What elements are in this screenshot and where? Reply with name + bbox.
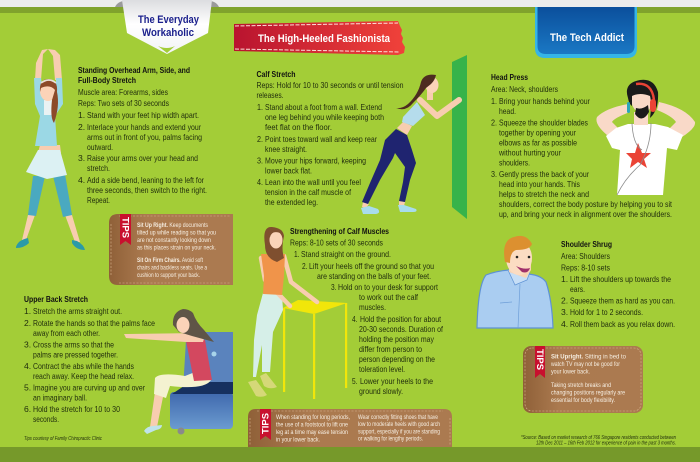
text: upper back stretch: Upper Back Stretch — [24, 294, 88, 304]
text: shoulder shrug: ears. — [570, 284, 585, 294]
text: head press: Area: Neck, shoulders — [491, 84, 558, 94]
text: standing overhead stretch: stretch. — [87, 163, 110, 173]
text: upper back stretch: seconds. — [33, 414, 59, 424]
text: shoulder shrug: Roll them back as you relax down. — [570, 319, 675, 329]
text: standing overhead stretch: Repeat. — [87, 195, 110, 205]
text: upper back stretch: palms are pressed together. — [33, 350, 118, 360]
tips box 3: Sit Upright. Sitting in bed to — [551, 354, 627, 360]
text: strengthening of calf muscles: 1. — [294, 249, 300, 259]
text: shoulder shrug: Area: Shoulders — [561, 251, 610, 261]
tips box 3: Taking stretch breaks and — [551, 382, 611, 389]
text: strengthening of calf muscles: 2. — [302, 261, 308, 271]
text: standing overhead stretch: Full-Body Stretch — [78, 75, 136, 85]
tips box 1: TIPS — [120, 217, 130, 238]
text: head press: head into your hands. This — [499, 179, 580, 189]
text: head press: elbows as far as possible — [499, 138, 577, 148]
footnote: source: 12th Dec 2011 – 16th Feb 2012 for experience of pain in the past 3 months. — [536, 440, 676, 446]
tips box 2: When standing for long periods, — [276, 414, 350, 421]
tips box 2: support, especially if you are standing — [358, 428, 440, 436]
text: calf stretch: tension in the calf muscle of — [265, 187, 351, 197]
text: shoulder shrug: Hold for 1 to 2 seconds. — [570, 307, 643, 317]
heading tab: The Tech Addict — [535, 7, 637, 58]
heading banner: The High-Heeled Fashionista: The High-Heeled Fashionista — [258, 33, 391, 45]
tips box 3: changing positions regularly are — [551, 390, 625, 396]
heading tab: The Tech Addict: The Tech Addict — [550, 32, 624, 44]
text: strengthening of calf muscles: muscles. — [359, 302, 386, 312]
text: head press: Head Press — [491, 72, 528, 82]
panel: the everyday workaholic — [16, 0, 233, 442]
text: strengthening of calf muscles: Hold on to your desk for support — [338, 282, 438, 292]
text: calf stretch: 4. — [257, 177, 263, 187]
text: shoulder shrug: 2. — [561, 296, 568, 306]
text: standing overhead stretch: Reps: Two sets of 30 seconds — [78, 98, 169, 108]
panel: the high-heeled fashionista — [234, 21, 467, 447]
tips box 1: cushion to support your back. — [137, 272, 200, 279]
text: upper back stretch: away from each other. — [33, 328, 100, 338]
text: standing overhead stretch — [78, 65, 207, 205]
text: strengthening of calf muscles: Strengthening of Calf Muscles — [290, 226, 389, 236]
panel: the tech addict — [477, 7, 695, 446]
text: head press: together by opening your — [499, 128, 576, 138]
text: strengthening of calf muscles: 3. — [331, 282, 336, 292]
text: shoulder shrug: Lift the shoulders up towards the — [570, 274, 671, 284]
text: calf stretch — [256, 69, 404, 207]
text: upper back stretch — [24, 294, 155, 424]
text: upper back stretch: Contract the abs while the hands — [33, 361, 134, 371]
text: head press: Squeeze the shoulder blades — [499, 118, 588, 128]
text: strengthening of calf muscles: differ from person to — [359, 344, 422, 354]
text: calf stretch: one leg behind you while keeping both — [265, 112, 384, 122]
tips box 1: as this places strain on your neck. — [137, 244, 216, 252]
text: standing overhead stretch: arms out in front of you, palms facing — [87, 132, 202, 142]
illustration: seated woman on sofa — [124, 309, 233, 434]
text: standing overhead stretch: Raise your arms over your head and — [87, 153, 198, 163]
text: head press: 3. — [491, 169, 497, 179]
text: calf stretch: 1. — [257, 102, 263, 112]
tips box 2: Wear correctly fitting shoes that have — [358, 414, 438, 421]
text: standing overhead stretch: outward. — [87, 142, 113, 152]
text: calf stretch: Point toes toward wall and keep rear — [265, 134, 377, 144]
source note: family chiropractic clinic: Tips courtesy of Family Chiropractic Clinic — [24, 436, 102, 442]
text: calf stretch: releases. — [256, 90, 284, 100]
text: strengthening of calf muscles: ground slowly. — [359, 386, 403, 396]
text: upper back stretch: 5. — [24, 382, 31, 392]
illustration: man in blue shirt shrugging — [477, 236, 553, 328]
text: standing overhead stretch: 2. — [78, 122, 85, 132]
illustration: woman doing calf stretch against wall — [361, 75, 459, 214]
text: strengthening of calf muscles: toleration level. — [359, 364, 405, 374]
tips box 2: the use of a footstool to lift one — [276, 422, 348, 428]
text: strengthening of calf muscles: to work out the calf — [359, 292, 418, 302]
text: shoulder shrug: Reps: 8-10 sets — [561, 262, 610, 272]
text: upper back stretch: reach away. Keep the head relax. — [33, 371, 134, 381]
tips box 2: low to moderate heels with good arch — [358, 421, 440, 428]
illustration: woman doing overhead stretch — [16, 49, 85, 250]
tips box 1: tilted up while reading so that you — [137, 230, 216, 236]
text: standing overhead stretch: Interlace your hands and extend your — [87, 122, 201, 132]
text: upper back stretch: Hold the stretch for 10 to 30 — [33, 404, 120, 414]
text: calf stretch: feet flat on the floor. — [265, 122, 332, 132]
tips box 1: chairs and backless seats. Use a — [137, 264, 207, 272]
text: upper back stretch: 3. — [24, 340, 31, 350]
text: calf stretch: Reps: Hold for 10 to 30 seconds or until tension — [256, 80, 404, 90]
tips box 2: or walking for lengthy periods. — [358, 436, 423, 442]
tips box 1: are not constantly looking down — [137, 237, 211, 244]
text: strengthening of calf muscles: 5. — [352, 376, 358, 386]
text: calf stretch: Stand about a foot from a wall. Extend — [265, 102, 382, 112]
text: upper back stretch: 2. — [24, 318, 31, 328]
text: shoulder shrug: Shoulder Shrug — [561, 239, 612, 249]
text: strengthening of calf muscles: 4. — [352, 314, 358, 324]
tips box 3: TIPS — [535, 349, 545, 370]
tips box 2: TIPS — [260, 413, 270, 434]
text: strengthening of calf muscles — [290, 226, 443, 396]
heading ribbon: The Everyday Workaholic: The Everyday — [138, 14, 200, 26]
tips box 2 — [248, 409, 452, 447]
text: standing overhead stretch: 1. — [78, 110, 85, 120]
text: strengthening of calf muscles: Hold the position for about — [360, 314, 441, 324]
text: strengthening of calf muscles: are standing on the balls of your feet. — [317, 271, 431, 281]
text: shoulder shrug: 1. — [561, 274, 568, 284]
text: strengthening of calf muscles: Lift your heels off the ground so that you — [309, 261, 434, 271]
text: calf stretch: Calf Stretch — [256, 69, 296, 79]
text: head press: shoulders. — [499, 158, 530, 168]
text: upper back stretch: Cross the arms so that the — [33, 340, 114, 350]
text: upper back stretch: 6. — [24, 404, 31, 414]
illustration: woman standing at yellow table — [248, 227, 347, 399]
text: head press: 2. — [491, 118, 497, 128]
text: head press: without hurting your — [498, 148, 561, 158]
text: standing overhead stretch: Muscle area: Forearms, sides — [78, 87, 168, 97]
tips box 3 — [523, 346, 643, 413]
text: head press: Gently press the back of your — [499, 169, 589, 179]
heading ribbon: The Everyday Workaholic — [115, 0, 219, 54]
text: standing overhead stretch: Standing Overhead Arm, Side, and — [78, 65, 190, 75]
tips box 3: your lower back. — [551, 368, 590, 376]
text: calf stretch: Lean into the wall until you feel — [265, 177, 361, 187]
text: strengthening of calf muscles: holding the position may — [359, 334, 435, 344]
tips box 1: Sit Up Right. Keep documents — [137, 222, 208, 229]
tips box 1 — [109, 214, 233, 285]
illustration: man with headphones pressing head — [596, 80, 695, 195]
text: standing overhead stretch: Stand with your feet hip width apart. — [87, 110, 199, 120]
text: strengthening of calf muscles: Reps: 8-10 sets of 30 seconds — [290, 238, 383, 248]
text: calf stretch: Move your hips forward, keeping — [265, 156, 366, 166]
text: shoulder shrug: Squeeze them as hard as you can. — [570, 296, 675, 306]
text: standing overhead stretch: three seconds, then switch to the right. — [87, 185, 207, 195]
text: upper back stretch: 1. — [24, 306, 31, 316]
text: upper back stretch: 4. — [24, 361, 31, 371]
text: head press: helps to stretch the neck and — [499, 189, 589, 199]
tips box 1: Sit On Firm Chairs. Avoid soft — [137, 257, 203, 264]
heading banner: The High-Heeled Fashionista — [234, 21, 405, 55]
text: shoulder shrug: 3. — [561, 307, 568, 317]
text: head press — [491, 72, 672, 219]
illustration: green wall — [452, 55, 467, 219]
text: head press: head. — [499, 106, 516, 116]
text: strengthening of calf muscles: person depending on the — [359, 354, 435, 364]
text: standing overhead stretch: 3. — [78, 153, 85, 163]
text: calf stretch: 3. — [257, 156, 263, 166]
text: calf stretch: lower back flat. — [265, 166, 312, 176]
text: upper back stretch: Stretch the arms straight out. — [33, 306, 122, 316]
text: calf stretch: knee straight. — [265, 144, 307, 154]
text: head press: Bring your hands behind your — [499, 96, 590, 106]
footnote: source — [521, 435, 676, 446]
text: shoulder shrug — [561, 239, 675, 329]
text: upper back stretch: an imaginary ball. — [33, 392, 87, 402]
text: upper back stretch: Imagine you are curving up and over — [33, 382, 145, 392]
text: standing overhead stretch: 4. — [78, 175, 85, 185]
text: strengthening of calf muscles: 20-30 seconds. Duration of — [359, 324, 443, 334]
heading ribbon: The Everyday Workaholic: Workaholic — [142, 27, 194, 39]
text: upper back stretch: Rotate the hands so that the palms face — [33, 318, 155, 328]
tips box 3: watch TV may not be good for — [550, 361, 620, 368]
text: standing overhead stretch: Add a side bend, leaning to the left for — [87, 175, 204, 185]
text: strengthening of calf muscles: Stand straight on the ground. — [301, 249, 391, 259]
text: head press: 1. — [491, 96, 497, 106]
text: strengthening of calf muscles: Lower your heels to the — [360, 376, 433, 386]
text: calf stretch: the extended leg. — [265, 197, 318, 207]
tips box 2: in your lower back. — [276, 436, 320, 444]
text: shoulder shrug: 4. — [561, 319, 568, 329]
tips box 3: essential for body flexibility. — [551, 397, 615, 404]
tips box 2: leg at a time may ease tension — [276, 429, 348, 436]
text: calf stretch: 2. — [257, 134, 263, 144]
